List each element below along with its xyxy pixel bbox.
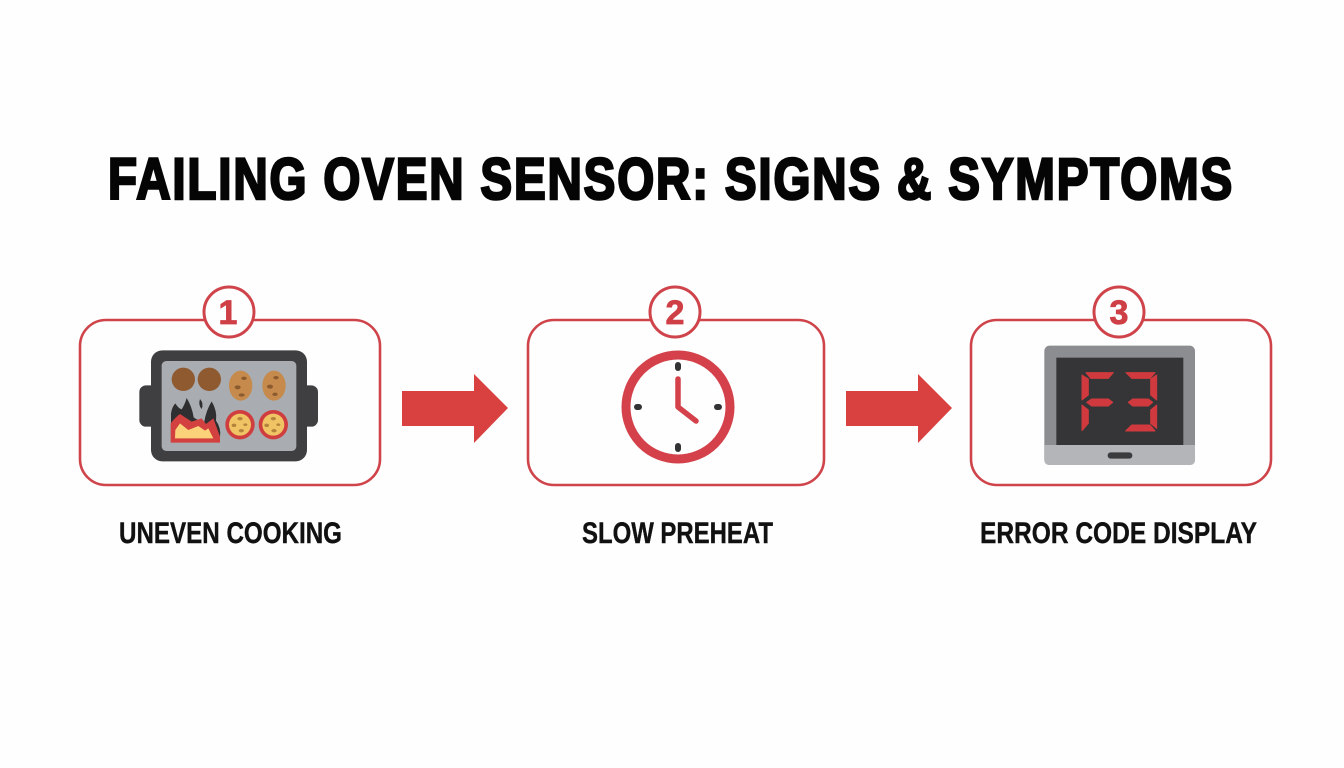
arrow: step 2 to step 3 xyxy=(846,374,952,443)
arrow: step 1 to step 2 xyxy=(402,374,508,443)
number badge 2 xyxy=(650,287,700,337)
number badge 1 xyxy=(204,287,254,337)
title: FAILING OVEN SENSOR: SIGNS & SYMPTOMS xyxy=(108,148,1232,212)
card outline 1 xyxy=(80,320,380,485)
panel: uneven cooking xyxy=(80,287,380,485)
label: error code display: ERROR CODE DISPLAY xyxy=(980,517,1257,550)
panel: slow preheat xyxy=(528,287,824,485)
icon: baking tray with burning food xyxy=(139,350,318,461)
card outline 2 xyxy=(528,320,824,485)
number badge 3 xyxy=(1094,287,1144,337)
number badge 1: 1 xyxy=(219,294,237,332)
label: slow preheat: SLOW PREHEAT xyxy=(582,517,773,550)
icon: oven display showing F3 xyxy=(1044,346,1195,465)
number badge 3: 3 xyxy=(1110,294,1128,332)
label: uneven cooking: UNEVEN COOKING xyxy=(119,517,342,550)
icon: clock xyxy=(626,355,730,459)
card outline 3 xyxy=(971,320,1271,485)
panel: error code display xyxy=(971,287,1271,485)
number badge 2: 2 xyxy=(666,294,684,332)
